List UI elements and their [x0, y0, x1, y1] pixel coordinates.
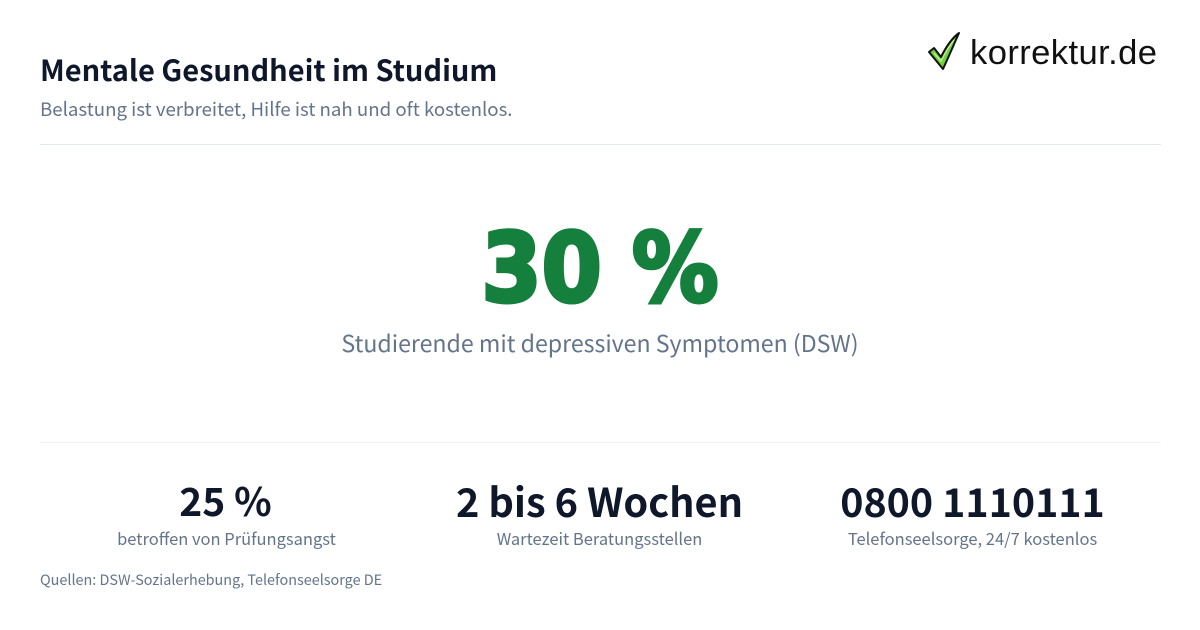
divider	[40, 144, 1161, 145]
sources: Quellen: DSW-Sozialerhebung, Telefonseelsorge DE	[40, 569, 382, 590]
title: Mentale Gesundheit im Studium	[40, 48, 497, 90]
hero stat: 30 %	[481, 214, 719, 324]
subtitle: Belastung ist verbreitet, Hilfe ist nah und oft kostenlos.	[40, 95, 512, 122]
stat: Prüfungsangst: betroffen von Prüfungsangst	[117, 526, 336, 550]
stat: Telefonseelsorge: 0800 1110111	[840, 472, 1105, 529]
divider	[40, 442, 1161, 443]
stat: Wartezeit: Wartezeit Beratungsstellen	[497, 526, 702, 550]
logo: korrektur.de: korrektur.de	[970, 34, 1157, 72]
stat: Prüfungsangst	[117, 472, 336, 550]
hero label: Studierende mit depressiven Symptomen (DSW)	[341, 325, 859, 359]
stat: Prüfungsangst: 25 %	[179, 472, 272, 528]
stat: Wartezeit: 2 bis 6 Wochen	[456, 472, 743, 529]
stat: Telefonseelsorge: Telefonseelsorge, 24/7 kostenlos	[848, 526, 1097, 550]
